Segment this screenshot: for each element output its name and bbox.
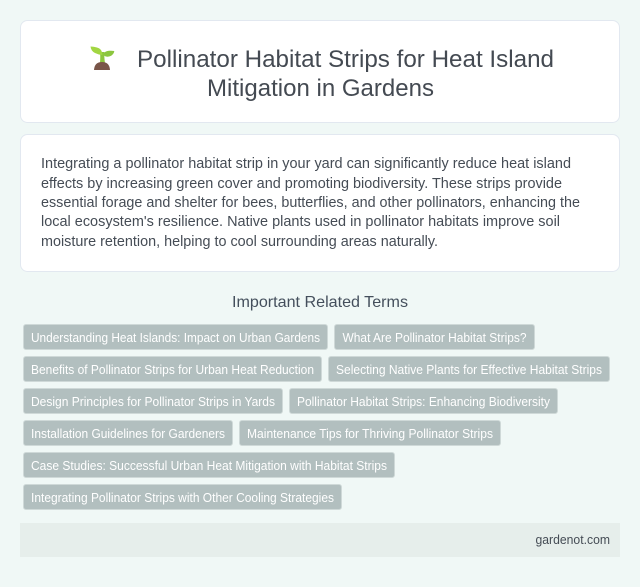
panel: intro text card: effects by increasing green cover and promoting biodiversity. These strips provide — [41, 176, 562, 192]
tag: understanding heat islands — [24, 324, 328, 350]
tag: selecting native plants: Selecting Native Plants for Effective Habitat Strips — [336, 362, 602, 377]
panel: intro text card — [20, 134, 620, 272]
title — [137, 46, 554, 102]
tag: benefits — [24, 356, 322, 382]
tag: integrating strips: Integrating Pollinator Strips with Other Cooling Strategies — [31, 490, 334, 505]
footer — [20, 523, 620, 557]
tag: installation guidelines — [24, 420, 232, 446]
tag: case studies: Case Studies: Successful Urban Heat Mitigation with Habitat Strips — [31, 458, 387, 473]
tag list — [24, 324, 610, 510]
tag: maintenance tips: Maintenance Tips for Thriving Pollinator Strips — [247, 426, 493, 441]
panel: intro text card: moisture retention, helping to cool surrounding areas naturally. — [41, 234, 438, 250]
heading: important related terms: Important Related Terms — [232, 294, 408, 311]
title: Mitigation in Gardens — [207, 75, 434, 102]
tag: design principles — [24, 388, 282, 414]
panel: intro text card: local ecosystem's resilience. Native plants used in pollinator habitats improve soil — [41, 214, 560, 230]
tag: maintenance tips — [240, 420, 500, 446]
icon: seedling — [90, 46, 114, 70]
tag: what are strips: What Are Pollinator Habitat Strips? — [342, 330, 526, 345]
panel: intro text card: essential forage and shelter for bees, butterflies, and other pollinators, enhancing the — [41, 195, 580, 211]
tag: enhancing biodiversity — [290, 388, 558, 414]
tag: enhancing biodiversity: Pollinator Habitat Strips: Enhancing Biodiversity — [297, 394, 550, 409]
footer: gardenot.com — [536, 532, 610, 547]
tag: case studies — [24, 452, 394, 478]
tag: selecting native plants — [328, 356, 610, 382]
tag: integrating strips — [24, 484, 342, 510]
panel: header card — [20, 20, 620, 122]
title: Pollinator Habitat Strips for Heat Island — [137, 46, 554, 73]
panel: intro text card: Integrating a pollinator habitat strip in your yard can significantly reduce heat island — [41, 156, 571, 172]
tag: design principles: Design Principles for Pollinator Strips in Yards — [31, 394, 275, 409]
tag: installation guidelines: Installation Guidelines for Gardeners — [31, 426, 225, 441]
tag: benefits: Benefits of Pollinator Strips for Urban Heat Reduction — [31, 362, 314, 377]
tag: understanding heat islands: Understanding Heat Islands: Impact on Urban Gardens — [31, 330, 320, 345]
tag: what are strips — [334, 324, 534, 350]
